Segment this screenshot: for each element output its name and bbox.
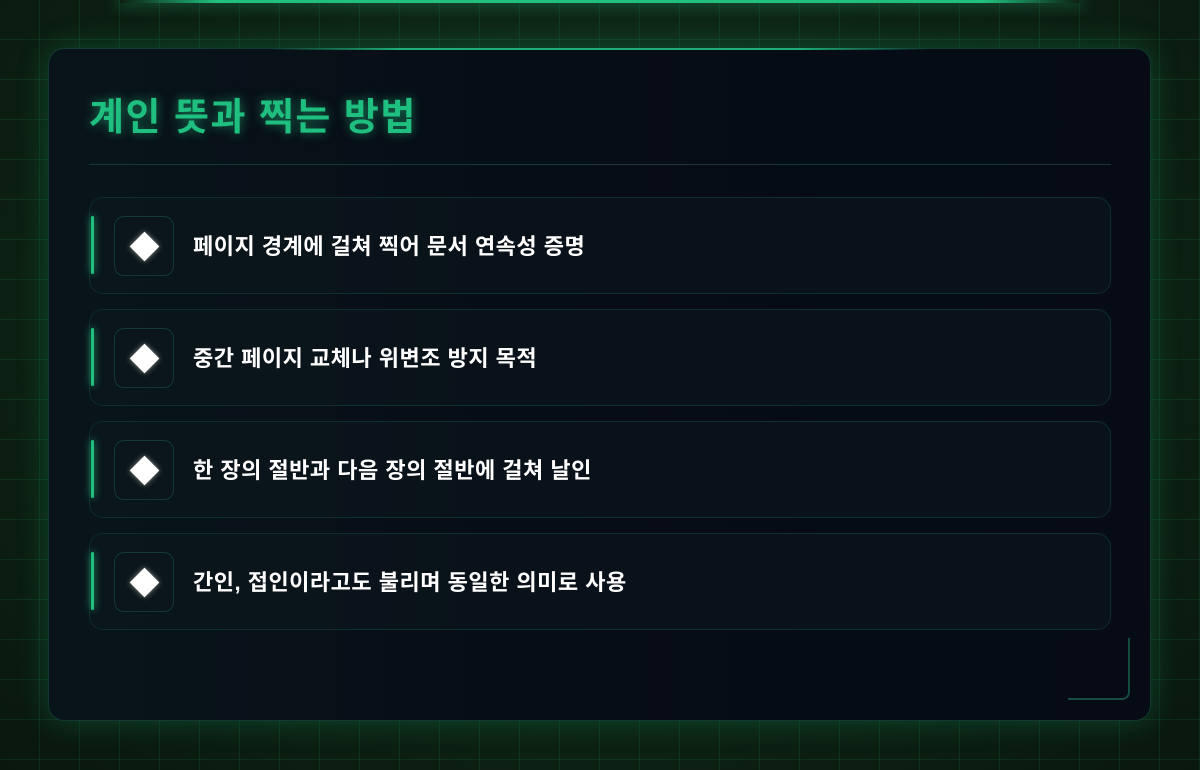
item 2 (89, 309, 1111, 406)
icon: diamond (114, 216, 174, 276)
text: item 2: 중간 페이지 교체나 위변조 방지 목적 (193, 346, 537, 371)
text: item 4: 간인, 접인이라고도 불리며 동일한 의미로 사용 (193, 570, 627, 595)
title: 계인 뜻과 찍는 방법 (89, 97, 417, 139)
item 4 (89, 533, 1111, 630)
icon: diamond (114, 328, 174, 388)
text: item 3: 한 장의 절반과 다음 장의 절반에 걸쳐 날인 (193, 458, 592, 483)
item 1 (89, 197, 1111, 294)
item 3 (89, 421, 1111, 518)
icon: diamond (114, 440, 174, 500)
text: item 1: 페이지 경계에 걸쳐 찍어 문서 연속성 증명 (193, 234, 585, 259)
icon: diamond (114, 552, 174, 612)
